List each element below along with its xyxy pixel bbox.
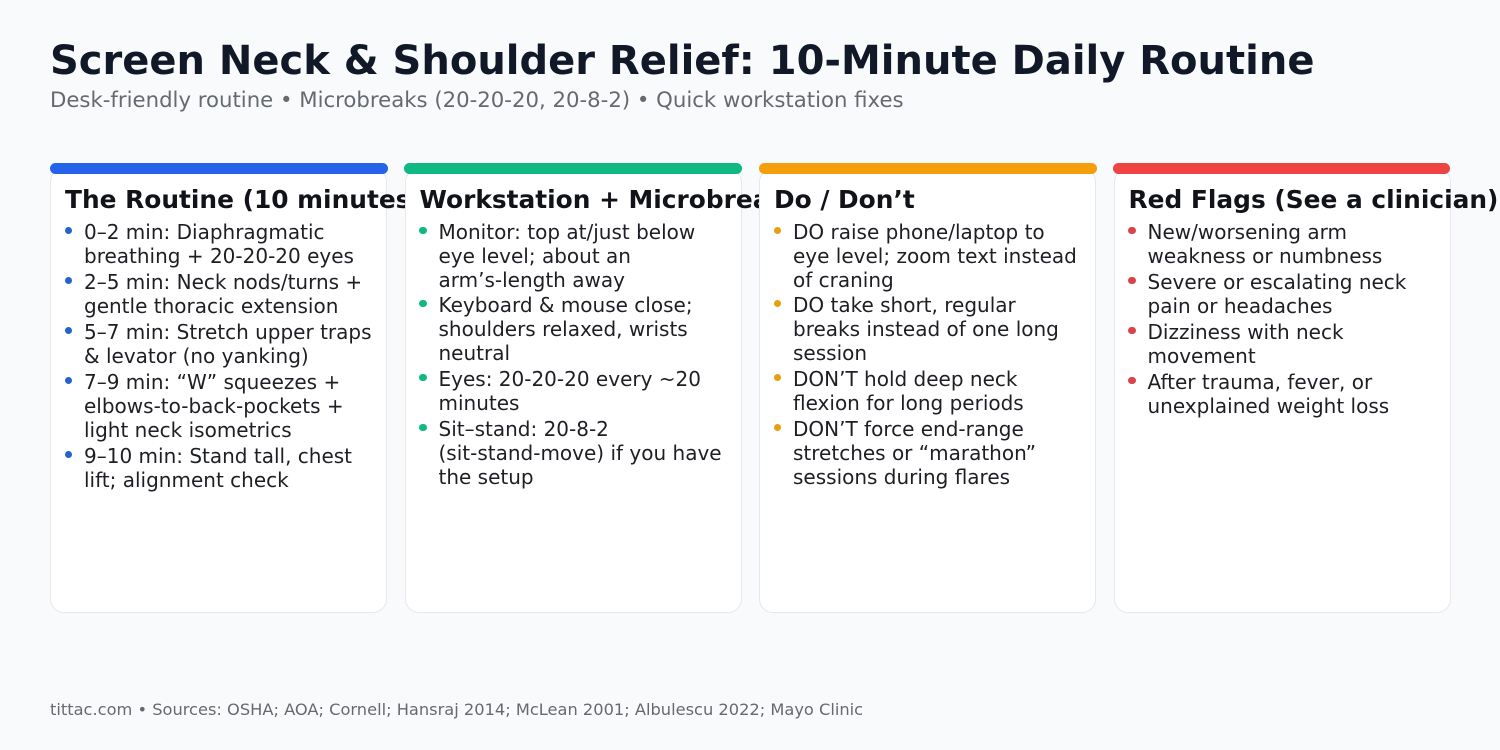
workstation list xyxy=(419,220,722,489)
routine list xyxy=(65,220,372,492)
panel heading: workstation: Workstation + Microbreaks xyxy=(420,185,801,214)
accent bar: red xyxy=(1113,162,1450,174)
red flags list: New/worsening arm xyxy=(1148,220,1347,244)
subtitle: Desk-friendly routine • Microbreaks (20-20-20, 20-8-2) • Quick workstation fixes xyxy=(50,88,904,113)
routine list: elbows-to-back-pockets + xyxy=(84,394,344,418)
workstation list: Keyboard & mouse close; xyxy=(438,293,693,317)
footer: sources: tittac.com • Sources: OSHA; AOA; Cornell; Hansraj 2014; McLean 2001; Albulescu 2022; Mayo Clinic xyxy=(50,700,863,719)
routine list: light neck isometrics xyxy=(84,418,292,442)
accent bar: blue xyxy=(50,162,388,174)
title: Screen Neck & Shoulder Relief: 10-Minute Daily Routine xyxy=(50,38,1314,84)
do / don't list: session xyxy=(793,341,867,365)
workstation list: arm’s-length away xyxy=(438,268,625,292)
red flags list: weakness or numbness xyxy=(1148,244,1382,268)
panel: red flags xyxy=(1114,168,1450,613)
workstation list: neutral xyxy=(438,341,510,365)
red flags list: movement xyxy=(1148,344,1256,368)
panel heading: the routine: The Routine (10 minutes) xyxy=(65,185,422,214)
routine list: 7–9 min: “W” squeezes + xyxy=(84,370,340,394)
red flags list: Severe or escalating neck xyxy=(1148,270,1406,294)
routine list: breathing + 20-20-20 eyes xyxy=(84,244,354,268)
routine list: & levator (no yanking) xyxy=(84,344,309,368)
red flags list: pain or headaches xyxy=(1148,294,1332,318)
workstation list: minutes xyxy=(438,391,519,415)
do / don't list: of craning xyxy=(793,268,894,292)
panel: the routine xyxy=(50,168,387,613)
panel: workstation + microbreaks xyxy=(404,168,742,613)
panel heading: red flags: Red Flags (See a clinician) xyxy=(1128,185,1498,214)
accent bar: green xyxy=(404,162,742,174)
do / don't list: eye level; zoom text instead xyxy=(793,244,1077,268)
workstation list: shoulders relaxed, wrists xyxy=(438,317,688,341)
red flags list: unexplained weight loss xyxy=(1148,394,1389,418)
panel: do / don't xyxy=(759,168,1096,613)
do / don't list: breaks instead of one long xyxy=(793,317,1059,341)
do / don't list: DON’T hold deep neck xyxy=(793,367,1017,391)
do / don't list: sessions during flares xyxy=(793,465,1010,489)
workstation list: the setup xyxy=(438,465,534,489)
workstation list: Eyes: 20-20-20 every ~20 xyxy=(438,367,701,391)
routine list: 9–10 min: Stand tall, chest xyxy=(84,444,352,468)
do / don't list: DO take short, regular xyxy=(793,293,1016,317)
do / don't list: flexion for long periods xyxy=(793,391,1024,415)
do / don't list: stretches or “marathon” xyxy=(793,441,1036,465)
do / don't list xyxy=(774,220,1077,489)
routine list: 5–7 min: Stretch upper traps xyxy=(84,320,372,344)
red flags list: After trauma, fever, or xyxy=(1148,370,1372,394)
workstation list: Sit–stand: 20-8-2 xyxy=(438,417,609,441)
do / don't list: DON’T force end-range xyxy=(793,417,1024,441)
routine list: lift; alignment check xyxy=(84,468,289,492)
routine list: 0–2 min: Diaphragmatic xyxy=(84,220,325,244)
panel heading: do / don't: Do / Don’t xyxy=(774,185,915,214)
workstation list: Monitor: top at/just below xyxy=(438,220,695,244)
do / don't list: DO raise phone/laptop to xyxy=(793,220,1045,244)
accent bar: amber xyxy=(759,162,1096,174)
routine list: gentle thoracic extension xyxy=(84,294,338,318)
routine list: 2–5 min: Neck nods/turns + xyxy=(84,270,362,294)
workstation list: eye level; about an xyxy=(438,244,631,268)
red flags list xyxy=(1128,220,1406,418)
workstation list: (sit-stand-move) if you have xyxy=(438,441,722,465)
red flags list: Dizziness with neck xyxy=(1148,320,1344,344)
